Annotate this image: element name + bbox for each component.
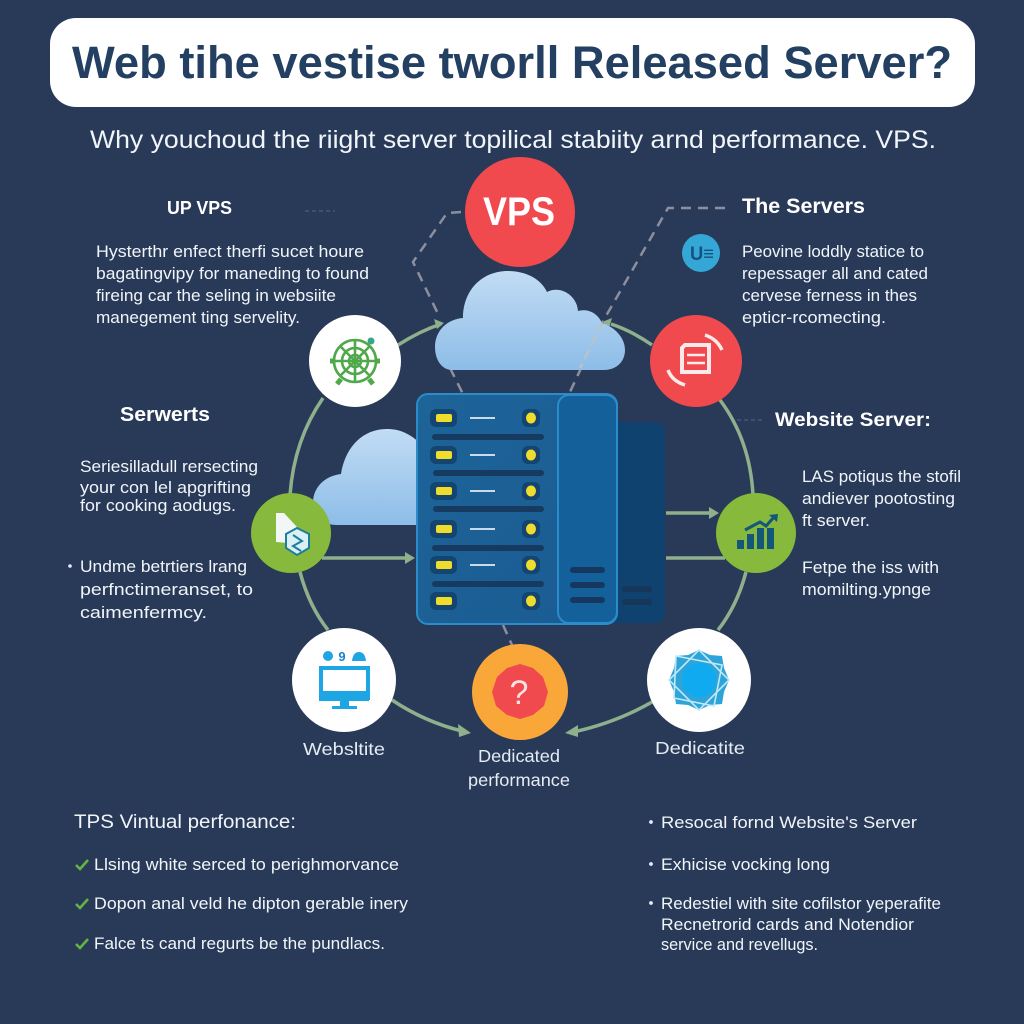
panel: Website Server xyxy=(775,410,961,599)
panel: UP VPS xyxy=(96,198,369,327)
list item 2: Dopon anal veld he dipton gerable inery xyxy=(94,895,409,913)
text block: The Servers body: repessager all and cated xyxy=(742,265,928,283)
list item 2: Exhicise vocking long xyxy=(661,856,830,874)
label: Websltite: Websltite xyxy=(303,739,385,759)
icon: left cloud xyxy=(313,429,420,525)
text block: Website Server body xyxy=(802,468,961,530)
icon: VPS circle: VPS xyxy=(483,190,555,234)
text block: Website Server note: momilting.ypnge xyxy=(802,581,931,599)
panel: Serwerts xyxy=(68,404,258,622)
title banner: Web tihe vestise tworll Released Server? xyxy=(72,37,952,88)
icon: green circle shield xyxy=(251,493,331,573)
dashed connectors xyxy=(305,208,762,645)
panel: bottom left list xyxy=(74,812,409,953)
icon: white circle monitor: 9 xyxy=(338,649,346,664)
label: Dedicated performance xyxy=(468,746,570,790)
icon: orange question gear xyxy=(472,644,568,740)
text block: Website Server body: andiever pootosting xyxy=(802,490,955,508)
icon: teal badge: U≡ xyxy=(690,244,714,265)
text block: UP VPS body: Hysterthr enfect therfi sucet houre xyxy=(96,243,364,261)
text block: The Servers body: epticr-rcomecting. xyxy=(742,309,886,327)
icon: orange question gear: ? xyxy=(510,674,528,712)
panel: bottom right list xyxy=(649,814,941,954)
list item 3: service and revellugs. xyxy=(661,936,818,954)
list item 1: Resocal fornd Website's Server xyxy=(661,814,918,832)
text block: UP VPS body: fireing car the seling in websiite xyxy=(96,287,336,305)
text block: UP VPS body xyxy=(96,243,369,327)
text block: Website Server body: LAS potiqus the stofil xyxy=(802,468,961,486)
heading: UP VPS: UP VPS xyxy=(167,198,232,218)
text block: UP VPS body: manegement ting servelity. xyxy=(96,309,300,327)
list item 3: Falce ts cand regurts be the pundlacs. xyxy=(94,935,385,953)
icon: top cloud xyxy=(435,271,625,370)
icon: red document circle xyxy=(650,315,742,407)
server rows xyxy=(430,409,544,610)
icon: teal badge xyxy=(682,234,720,272)
title banner xyxy=(50,18,975,107)
text block: Serwerts bullet: caimenfermcy. xyxy=(80,603,207,622)
icon: white circle monitor xyxy=(292,628,396,732)
icon: white circle green wheel xyxy=(309,315,401,407)
list item 3 xyxy=(649,895,941,954)
text block: Website Server note: Fetpe the iss with xyxy=(802,559,939,577)
heading: Serwerts: Serwerts xyxy=(120,404,210,426)
server back panel xyxy=(600,422,665,623)
list item 3: Recnetrorid cards and Notendior xyxy=(661,916,915,934)
server illustration xyxy=(417,394,665,624)
ring connector arcs xyxy=(290,324,753,732)
text block: Serwerts bullet: Undme betrtiers lrang xyxy=(80,558,247,576)
text block: Serwerts bullet: perfnctimeranset, to xyxy=(80,580,253,599)
arrowheads xyxy=(405,318,719,737)
text block: The Servers body: cervese ferness in thes xyxy=(742,287,917,305)
icon: white circle polygon globe xyxy=(647,628,751,732)
text block: Serwerts body: your con lel apgrifting xyxy=(80,479,251,497)
panel: The Servers xyxy=(742,195,928,327)
subtitle: Why youchoud the riight server topilical stabiity arnd performance. VPS. xyxy=(90,126,936,154)
heading: The Servers: The Servers xyxy=(742,195,865,218)
list item 1: Llsing white serced to perighmorvance xyxy=(94,856,399,874)
heading: TPS Vintual perfonance: TPS Vintual perfonance: xyxy=(74,812,296,833)
text block: Website Server note xyxy=(802,559,939,599)
text block: Serwerts body xyxy=(80,458,258,515)
text block: Serwerts bullet xyxy=(68,558,253,622)
label: Dedicatite: Dedicatite xyxy=(655,738,745,758)
text block: The Servers body xyxy=(742,243,928,327)
list item 3: Redestiel with site cofilstor yeperafite xyxy=(661,895,941,913)
label: Dedicated performance: Dedicated xyxy=(478,746,560,766)
label: Dedicated performance: performance xyxy=(468,770,570,790)
text block: UP VPS body: bagatingvipy for maneding to found xyxy=(96,265,369,283)
text block: Website Server body: ft server. xyxy=(802,512,870,530)
dashed line over cloud xyxy=(580,323,602,368)
heading: Website Server: Website Server: xyxy=(775,410,931,431)
icon: green circle chart xyxy=(716,493,796,573)
icon: VPS circle xyxy=(465,157,575,267)
text block: Serwerts body: Seriesilladull rersecting xyxy=(80,458,258,476)
server main body xyxy=(417,394,617,624)
server side panel xyxy=(558,395,617,623)
text block: Serwerts body: for cooking aodugs. xyxy=(80,497,236,515)
text block: The Servers body: Peovine loddly statice to xyxy=(742,243,924,261)
